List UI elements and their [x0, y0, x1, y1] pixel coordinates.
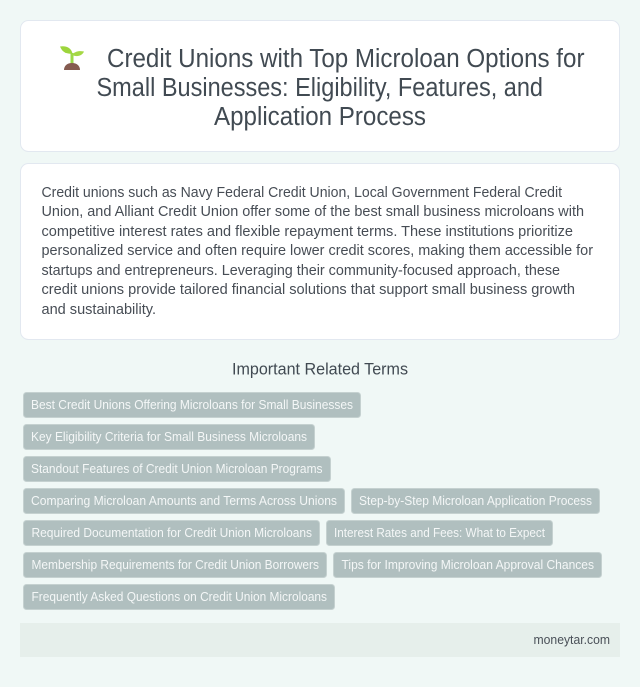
- text block: summary paragraph: personalized service and often require lower credit scores, making them accessible for: [42, 243, 593, 259]
- text block: summary paragraph: [42, 185, 593, 318]
- tag: Step-by-Step Microloan Application Process: [359, 493, 592, 508]
- tag: [24, 392, 360, 418]
- tag: [334, 552, 602, 578]
- tag: [326, 520, 552, 546]
- tag: [24, 456, 330, 482]
- tag: Best Credit Unions Offering Microloans for Small Businesses: [31, 397, 353, 412]
- tag: Membership Requirements for Credit Union Borrowers: [32, 557, 319, 572]
- footer: [20, 623, 620, 657]
- tag: Key Eligibility Criteria for Small Business Microloans: [31, 429, 307, 444]
- tag: Required Documentation for Credit Union Microloans: [32, 525, 312, 540]
- tag: [24, 584, 334, 610]
- tag: [24, 520, 320, 546]
- tag: Interest Rates and Fees: What to Expect: [334, 525, 545, 540]
- tag: [24, 552, 326, 578]
- text block: summary paragraph: competitive interest rates and flexible repayment terms. These institutions prioritize: [42, 224, 573, 240]
- title: Application Process: [214, 103, 426, 131]
- tag: Tips for Improving Microloan Approval Chances: [342, 557, 594, 572]
- text block: summary paragraph: credit unions provide tailored financial solutions that support small business growth: [42, 282, 575, 298]
- tag: Standout Features of Credit Union Microloan Programs: [31, 461, 322, 476]
- tag: [24, 488, 344, 514]
- tag: [24, 424, 314, 450]
- panel: summary card: [20, 164, 620, 340]
- panel: title card: [20, 20, 620, 152]
- tag: Comparing Microloan Amounts and Terms Across Unions: [31, 493, 337, 508]
- tag list: related terms: [24, 392, 602, 610]
- title: Small Businesses: Eligibility, Features, and: [96, 74, 543, 102]
- tag: Frequently Asked Questions on Credit Union Microloans: [32, 589, 327, 604]
- title: Credit Unions with Top Microloan Options for: [107, 45, 585, 73]
- text block: summary paragraph: startups and entrepreneurs. Leveraging their community-focused approach, these: [42, 263, 560, 279]
- heading: important related terms: Important Related Terms: [232, 360, 408, 378]
- tag: [352, 488, 600, 514]
- title: [96, 45, 585, 131]
- text block: summary paragraph: Credit unions such as Navy Federal Credit Union, Local Government Federal Credit: [42, 185, 563, 201]
- text block: summary paragraph: and sustainability.: [42, 302, 156, 318]
- text block: summary paragraph: Union, and Alliant Credit Union offer some of the best small business microloans with: [42, 204, 584, 220]
- icon: seedling: [60, 46, 84, 70]
- footer: moneytar.com: [534, 632, 610, 647]
